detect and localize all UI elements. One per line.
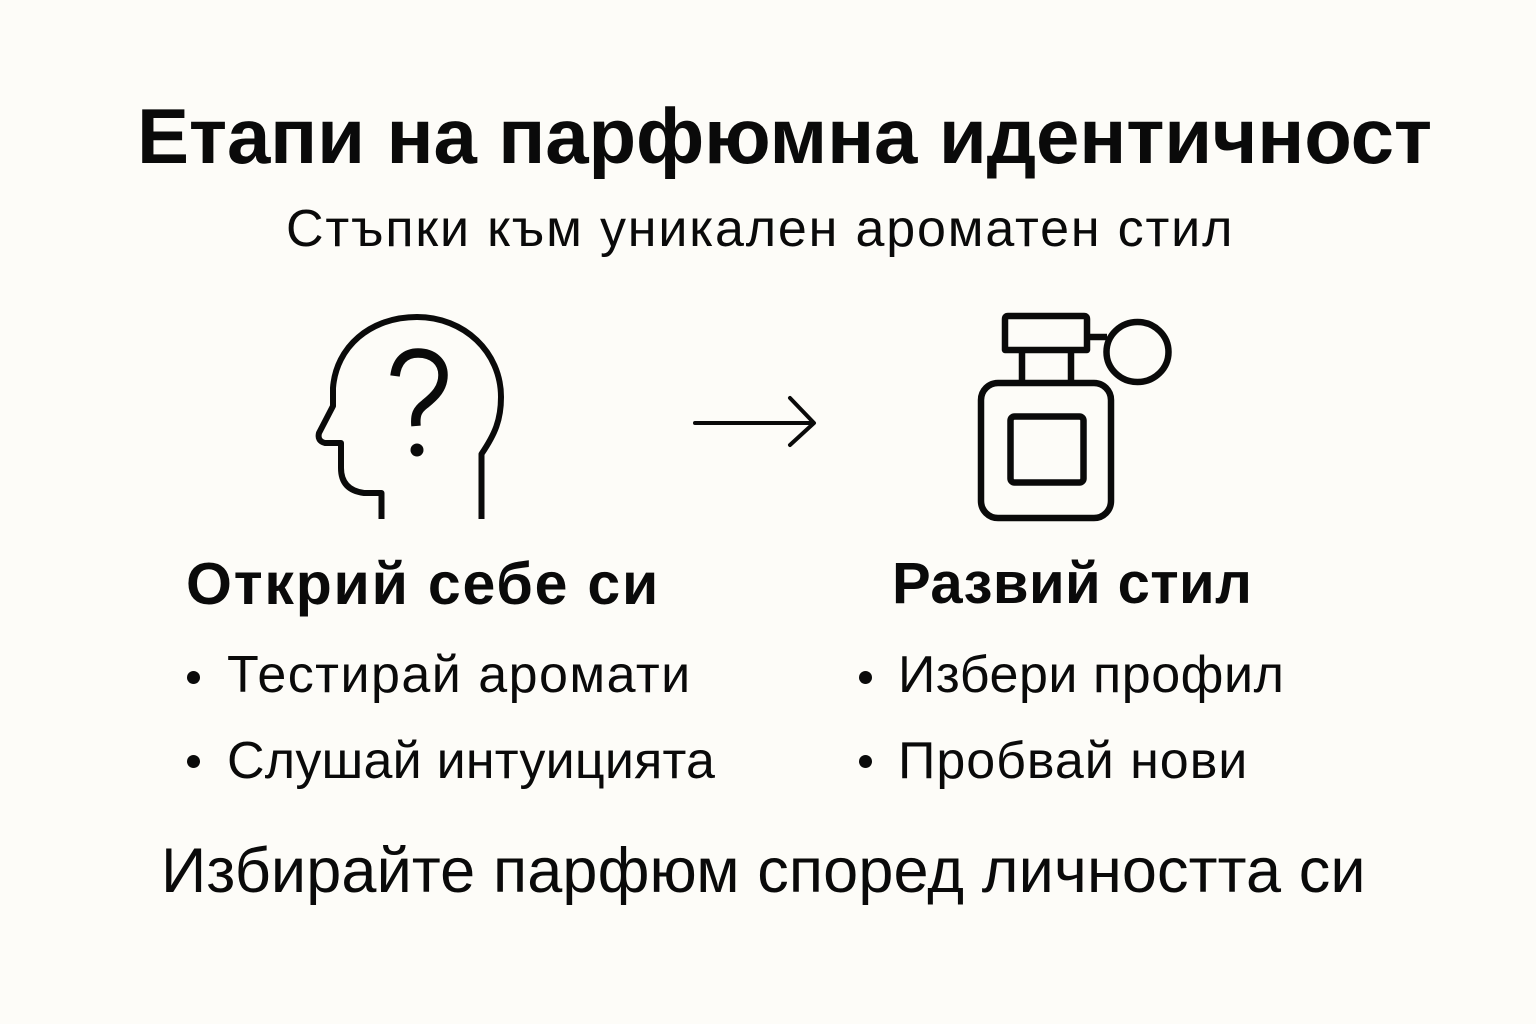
- subtitle: Стъпки към уникален ароматен стил: [286, 200, 1234, 258]
- bullet two: [187, 755, 200, 768]
- bullet text one: Тестирай аромати: [227, 646, 692, 704]
- icon: head with question mark: [316, 314, 504, 519]
- left column heading: Открий себе си: [186, 551, 660, 617]
- bullet one: [187, 671, 200, 684]
- bullet three: [859, 671, 872, 684]
- bullet text three: Избери профил: [898, 646, 1284, 704]
- title: Етапи на парфюмна идентичност: [137, 92, 1432, 180]
- left bullet list: [187, 646, 715, 790]
- right column heading: Развий стил: [892, 551, 1252, 616]
- bullet four: [859, 755, 872, 768]
- arrow: [693, 396, 816, 448]
- bullet text two: Слушай интуицията: [227, 732, 715, 790]
- icon: perfume bottle: [978, 312, 1172, 522]
- footer message: Избирайте парфюм според личността си: [161, 836, 1366, 906]
- bullet text four: Пробвай нови: [898, 732, 1248, 790]
- right bullet list: [859, 646, 1284, 790]
